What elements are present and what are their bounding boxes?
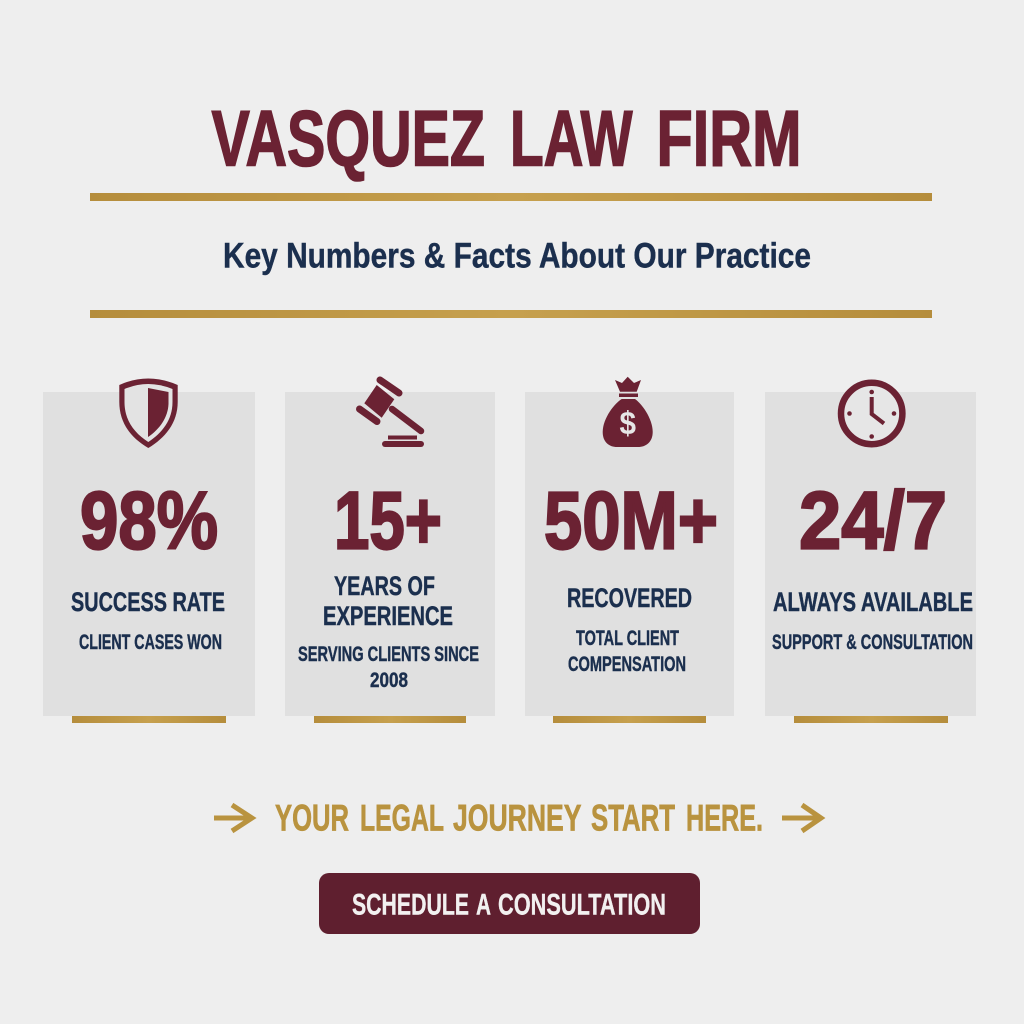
caption: total client compensation: TOTAL CLIENT	[576, 627, 679, 650]
caption: serving clients since 2008: 2008	[370, 669, 408, 692]
button: schedule a consultation: SCHEDULE	[352, 888, 469, 922]
icon: gavel	[360, 380, 421, 444]
icon: money bag: $	[620, 405, 636, 441]
stat: 24/7: 24/7	[799, 476, 947, 566]
icon: clock	[841, 383, 902, 444]
subtitle: Key Numbers & Facts About Our Practice	[223, 236, 811, 276]
button: schedule a consultation: A	[476, 888, 491, 922]
header	[90, 94, 932, 318]
caption: serving clients since 2008	[298, 643, 479, 692]
tagline text	[275, 798, 763, 838]
label: success rate: SUCCESS RATE	[71, 587, 225, 617]
stat: 50M+: 50M+	[544, 476, 718, 566]
label: years of experience: YEARS OF	[334, 571, 435, 601]
icon: shield	[119, 378, 178, 448]
title: VASQUEZ	[212, 94, 485, 182]
caption: client cases won: CLIENT CASES WON	[79, 631, 222, 654]
caption: total client compensation	[568, 627, 686, 676]
title: FIRM	[656, 94, 802, 182]
tagline text: YOUR	[275, 798, 349, 838]
panel: recovered	[525, 377, 734, 723]
stat: 98%: 98%	[80, 476, 218, 566]
tagline text: JOURNEY	[453, 798, 582, 838]
caption: total client compensation: COMPENSATION	[568, 653, 686, 676]
panel: years of experience	[285, 380, 495, 723]
label: years of experience: EXPERIENCE	[323, 601, 453, 631]
icon: money bag	[603, 377, 653, 447]
button: schedule a consultation: CONSULTATION	[498, 888, 666, 922]
arrow: left	[214, 805, 252, 831]
tagline text: LEGAL	[360, 798, 444, 838]
arrow: right	[782, 805, 821, 831]
title	[212, 94, 802, 182]
label: years of experience	[323, 571, 453, 631]
tagline text: START	[591, 798, 675, 838]
button: schedule a consultation	[319, 873, 700, 934]
stat: 15+: 15+	[334, 476, 442, 566]
panel: success rate	[43, 378, 255, 723]
title: LAW	[510, 94, 633, 182]
caption: serving clients since 2008: SERVING CLIENTS SINCE	[298, 643, 479, 666]
panel: always available	[765, 383, 976, 723]
label: recovered: RECOVERED	[567, 583, 692, 613]
tagline text: HERE.	[686, 798, 763, 838]
tagline	[214, 798, 821, 838]
